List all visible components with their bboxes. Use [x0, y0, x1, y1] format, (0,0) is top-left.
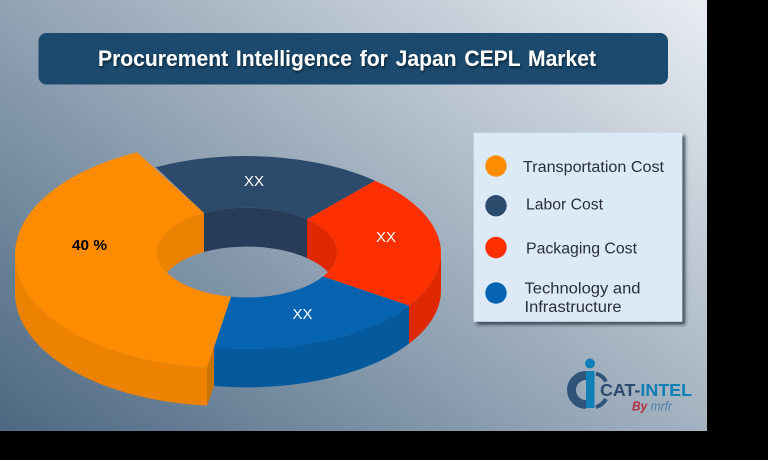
slice: labor cost: XX: [244, 173, 264, 190]
legend panel: [474, 133, 682, 322]
logo wordmark: CAT-INTEL: [600, 380, 692, 400]
slice: technology and infrastructure: [214, 276, 409, 387]
slice: technology and infrastructure: XX: [292, 306, 313, 323]
slice: transportation cost: 40 %: [72, 238, 107, 254]
legend: transportation cost: Transportation Cost: [523, 159, 665, 176]
legend: technology and infrastructure: Infrastructure: [524, 299, 622, 316]
slice: packaging cost: [307, 181, 441, 344]
legend: labor cost: Labor Cost: [526, 196, 604, 214]
legend: packaging cost: Packaging Cost: [526, 240, 638, 258]
title banner: [38, 33, 668, 84]
slice: packaging cost: XX: [376, 229, 396, 246]
slice: transportation cost: [15, 152, 231, 406]
logo tagline: By mrfr: [632, 398, 673, 414]
legend: transportation cost: [485, 155, 665, 177]
title: Procurement Intelligence for Japan CEPL Market: [98, 46, 597, 71]
slice: labor cost: [156, 156, 375, 258]
logo icon: [572, 358, 606, 408]
donut chart: [15, 152, 441, 406]
legend: technology and infrastructure: Technology and: [524, 280, 640, 298]
legend: packaging cost: [485, 237, 638, 258]
logo: CAT-INTEL by mrfr: [572, 358, 692, 414]
legend: labor cost: [485, 195, 604, 216]
legend: technology and infrastructure: [485, 280, 640, 316]
